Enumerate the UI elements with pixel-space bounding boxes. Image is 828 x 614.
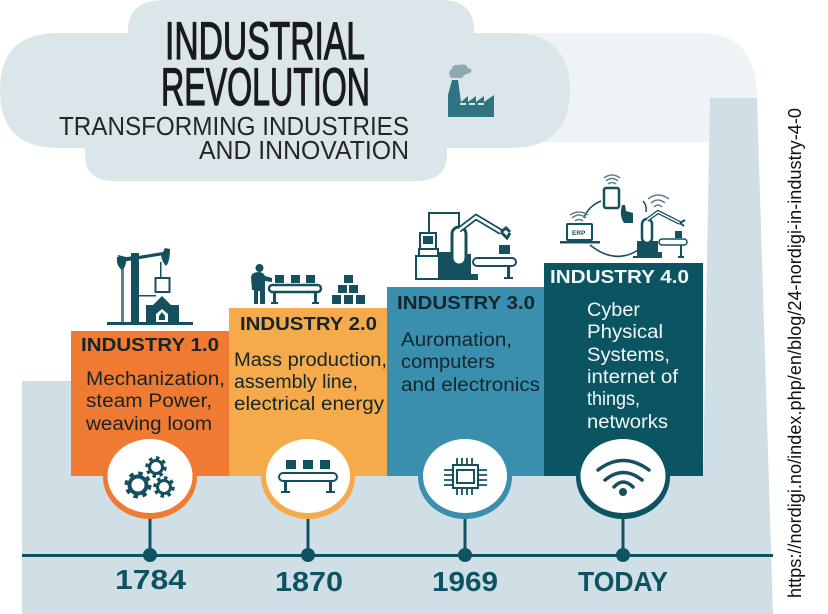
panel: industry 1.0: steam Power,	[86, 391, 212, 412]
panel: industry 4.0: Cyber	[587, 300, 641, 321]
icon: gears	[103, 435, 197, 519]
panel: industry 4.0: Systems,	[587, 345, 670, 366]
source url: https://nordigi.no/index.php/en/blog/24-nordigi-in-industry-4-0	[785, 108, 805, 598]
panel: industry 4.0: internet of	[587, 367, 679, 388]
panel: industry 4.0: things,	[587, 389, 640, 410]
panel: industry 2.0: Mass production,	[234, 350, 387, 371]
icon: assembly worker	[251, 264, 365, 304]
panel: industry 1.0: INDUSTRY 1.0	[81, 334, 219, 355]
panel: industry 1.0	[71, 331, 229, 476]
icon: factory	[448, 64, 494, 117]
title: INDUSTRIAL	[165, 12, 365, 71]
icon: cyber physical cycle	[560, 175, 687, 258]
panel: industry 4.0: networks	[587, 412, 668, 433]
title	[161, 12, 370, 117]
subtitle: AND INNOVATION	[199, 137, 409, 165]
year: 1969: 1969	[432, 566, 498, 597]
panel: industry 2.0: assembly line,	[234, 372, 358, 393]
panel: industry 4.0: Physical	[587, 322, 663, 343]
panel: industry 1.0: weaving loom	[85, 414, 212, 435]
panel: industry 4.0	[544, 263, 703, 476]
title: REVOLUTION	[161, 58, 370, 117]
panel: industry 3.0: Auromation,	[401, 330, 512, 351]
subtitle: TRANSFORMING INDUSTRIES	[59, 113, 409, 141]
icon: steam engine	[107, 248, 193, 325]
year: today: TODAY	[578, 566, 668, 597]
icon: robot arm	[416, 213, 516, 280]
subtitle	[59, 113, 409, 165]
panel: industry 2.0: INDUSTRY 2.0	[240, 313, 377, 334]
icon: microchip	[418, 435, 512, 519]
panel: industry 1.0: Mechanization,	[86, 369, 225, 390]
panel: industry 3.0: and electronics	[401, 375, 540, 396]
panel: industry 3.0: INDUSTRY 3.0	[397, 292, 535, 313]
icon: cyber physical cycle: ERP	[572, 230, 586, 237]
year: 1784: 1784	[115, 564, 186, 595]
year: 1870: 1870	[275, 566, 343, 597]
panel: industry 4.0: INDUSTRY 4.0	[550, 266, 689, 287]
timeline	[22, 515, 773, 562]
title cloud	[0, 0, 570, 181]
panel: industry 3.0	[387, 287, 544, 476]
panel: industry 3.0: computers	[401, 352, 495, 373]
panel: industry 2.0: electrical energy	[234, 394, 385, 415]
icon: conveyor	[261, 435, 355, 519]
panel: industry 2.0	[229, 308, 387, 476]
icon: wifi	[576, 435, 670, 519]
